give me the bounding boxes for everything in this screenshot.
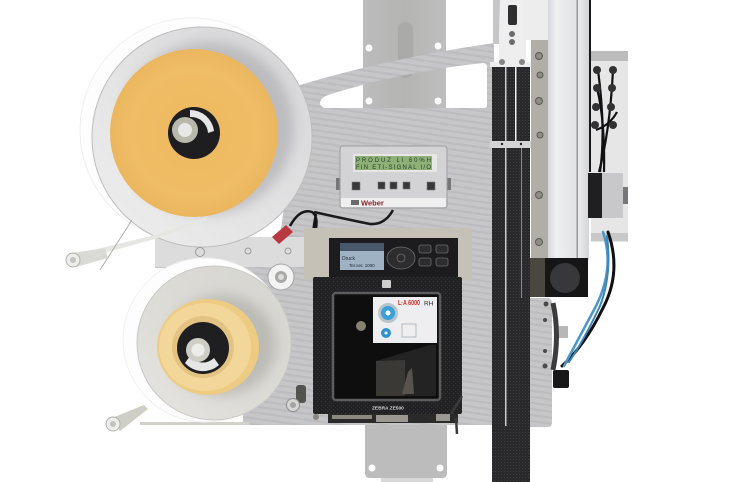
lower guide post (286, 385, 306, 412)
guide roller (268, 264, 294, 290)
label diagram (380, 304, 396, 322)
bolt (172, 117, 198, 143)
column clamp (490, 141, 533, 148)
plate tab screws (542, 302, 548, 368)
plate middle section (155, 237, 305, 267)
lower reel shadow (168, 295, 276, 395)
printer body: L·A 6000 (398, 300, 420, 307)
zebra logo: ZEBRA ZE500 (372, 406, 404, 412)
connector cables (596, 70, 617, 172)
lower tension arm (106, 405, 148, 431)
gold label roll (110, 49, 278, 217)
top clip (382, 280, 391, 288)
valve block (588, 173, 628, 218)
control panel: FIN ETI-SIGNAL I/O (356, 165, 431, 171)
reel shadow (122, 42, 294, 214)
hub (168, 107, 220, 159)
small screws (196, 248, 291, 256)
lower mounting bracket (365, 425, 447, 482)
printer lcd (340, 243, 384, 270)
upper mounting bracket (363, 0, 446, 108)
carbon fibre column (492, 66, 530, 482)
column top bracket (490, 0, 533, 67)
plate bottom strip (140, 422, 250, 425)
lower bolt (186, 338, 210, 362)
outer disc outline (80, 18, 304, 242)
printer control head: Ter.ser. 1000 (349, 263, 375, 268)
control panel (336, 146, 451, 208)
pneumatic blue hoses (562, 232, 614, 366)
rail black edge (589, 0, 591, 172)
window screw (356, 321, 366, 331)
plate right tab (530, 298, 552, 427)
upper label reel (80, 18, 312, 247)
silver mount strip (531, 40, 548, 264)
printer mount plate (304, 228, 472, 280)
printer keypad (387, 245, 448, 269)
linear rail (548, 0, 589, 260)
upper reel flange (92, 27, 312, 247)
lower hub (177, 322, 229, 374)
lower outer glow (123, 258, 287, 422)
cable to printer (314, 210, 393, 224)
control panel: PRODUZ LI 60%H (356, 158, 431, 164)
printer control head (329, 238, 458, 278)
panel buttons (352, 182, 435, 190)
lower label reel (123, 258, 291, 422)
model label (373, 297, 437, 343)
printer mechanics (376, 345, 436, 396)
hose fitting (553, 303, 569, 388)
printer bottom hardware (328, 414, 458, 423)
red connector and cable (272, 211, 316, 250)
weber logo: Weber (361, 198, 384, 208)
printer window (333, 293, 440, 400)
printer body (313, 277, 462, 434)
back plate (155, 43, 494, 425)
actuator motor (530, 258, 588, 297)
connector box (591, 51, 628, 242)
upper tension arm (66, 217, 207, 270)
upper carriage light panel (522, 0, 548, 40)
lcd display (353, 154, 437, 172)
printer control head: Druck (342, 256, 356, 262)
lower gold roll (157, 299, 259, 395)
lower reel flange (137, 266, 291, 420)
printer body: RH (424, 300, 434, 308)
